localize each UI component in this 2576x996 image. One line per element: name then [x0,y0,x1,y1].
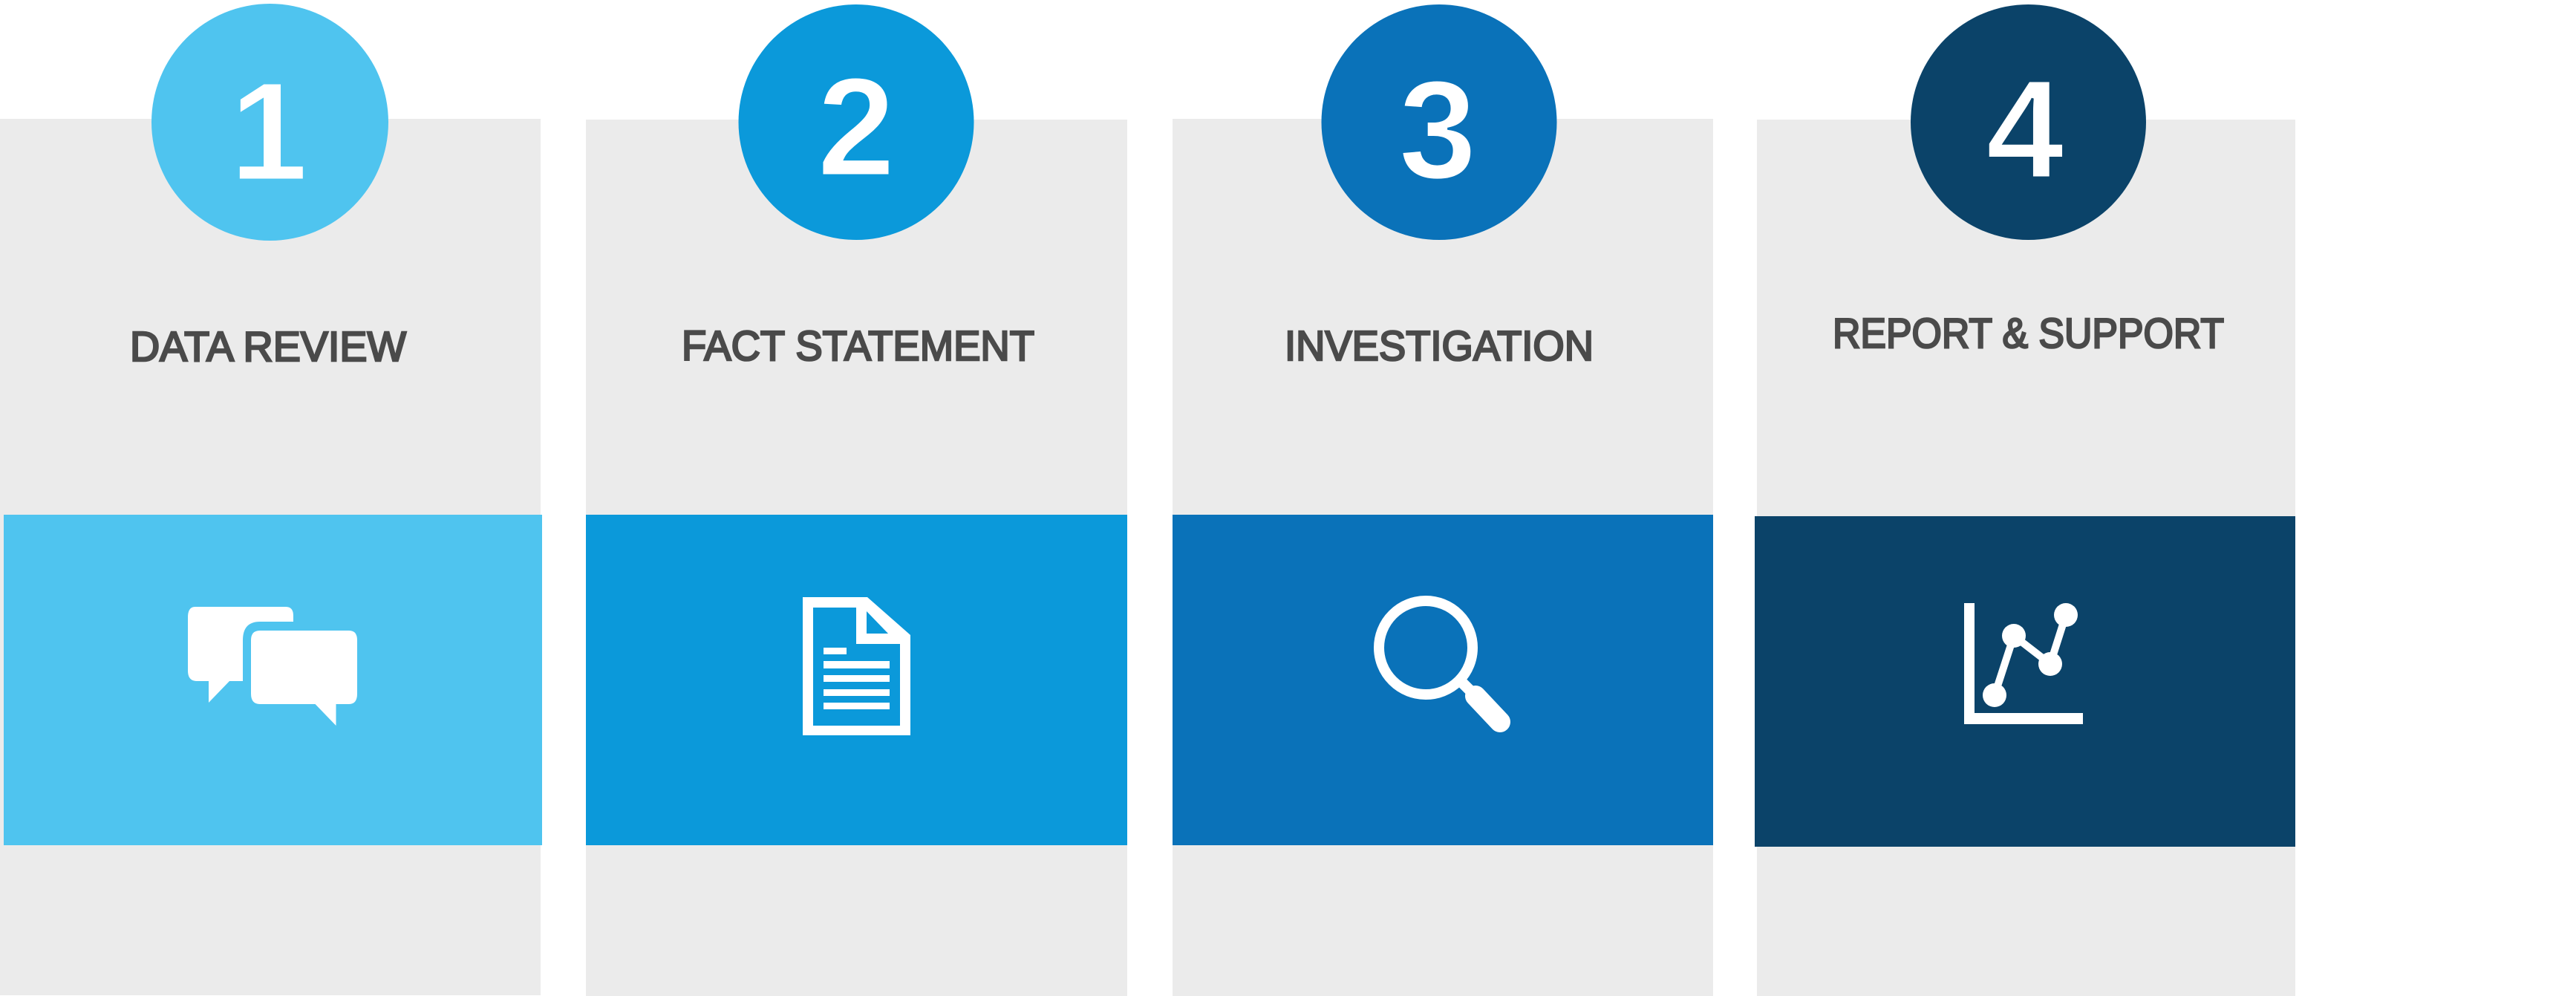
step 2 heading: FACT STATEMENT [682,322,1034,370]
step 4 colour band [1755,516,2295,847]
panel: step 3 investigation [1173,4,1713,996]
step 2 colour band [586,515,1127,845]
step 3 card background [1173,119,1713,996]
step 3 colour band [1173,515,1713,845]
icon: document [803,597,910,735]
icon: magnifying glass [1379,601,1500,722]
step 2 number badge [738,4,974,240]
step 2 card background [586,120,1127,996]
step 1 number badge [151,4,388,241]
step 4 number badge: 4 [1986,51,2064,208]
step 3 number badge [1322,4,1556,240]
step 1 heading: DATA REVIEW [130,323,406,371]
icon: speech bubbles [188,607,357,726]
step 1 card background [0,119,541,995]
step 3 number badge: 3 [1398,52,1477,209]
step 2 number badge: 2 [817,49,896,206]
step 4 heading: REPORT & SUPPORT [1833,310,2224,357]
panel: step 4 report and support [1755,4,2295,996]
step 1 number badge: 1 [229,53,308,210]
step 4 number badge [1911,4,2146,240]
step 4 card background [1757,120,2295,996]
panel: step 2 fact statement [586,4,1127,996]
icon: line chart [1964,603,2083,724]
panel: step 1 data review [0,4,542,995]
step 3 heading: INVESTIGATION [1285,322,1594,370]
step 1 colour band [4,515,542,845]
